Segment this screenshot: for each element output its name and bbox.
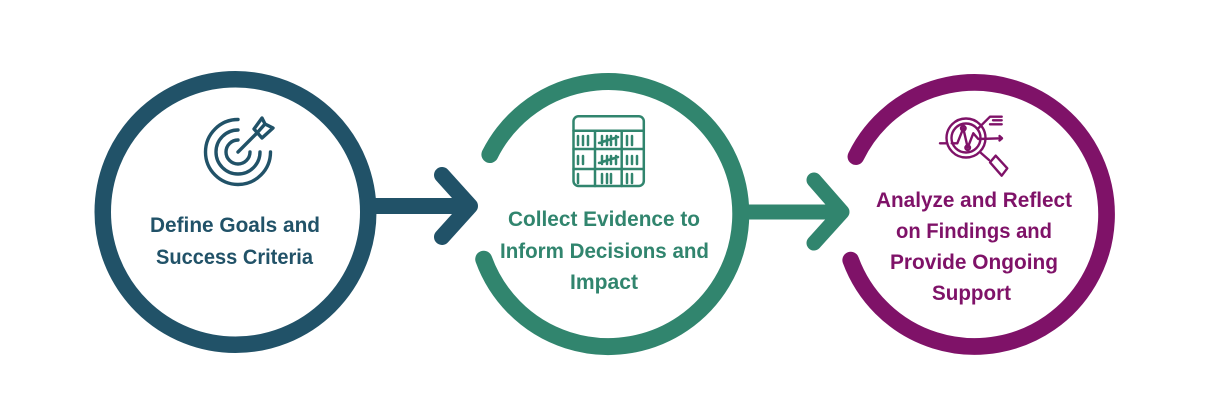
arrow: collect to analyze (746, 180, 842, 243)
label: analyze and reflect: Support (932, 282, 1011, 305)
panel: collect evidence (484, 82, 741, 347)
circle ring: analyze and reflect (851, 82, 1107, 346)
label: define goals: Success Criteria (156, 246, 313, 269)
panel: define goals (103, 79, 368, 345)
circle ring: collect evidence (484, 82, 741, 347)
label: analyze and reflect: Provide Ongoing (890, 251, 1058, 274)
arrow: define to collect (372, 175, 470, 237)
icon: magnifier over chart (940, 117, 1007, 176)
label: analyze and reflect (876, 189, 1072, 305)
panel: analyze and reflect (851, 82, 1107, 346)
icon: target with arrow (206, 118, 273, 184)
label: analyze and reflect: on Findings and (896, 220, 1052, 243)
label: collect evidence: Collect Evidence to (508, 208, 700, 231)
label: analyze and reflect: Analyze and Reflect (876, 189, 1072, 212)
label: collect evidence (500, 208, 709, 294)
label: collect evidence: Impact (570, 271, 638, 294)
circle ring: define goals (103, 79, 368, 345)
icon: tally table (574, 116, 644, 186)
label: collect evidence: Inform Decisions and (500, 240, 709, 263)
label: define goals (150, 214, 320, 269)
label: define goals: Define Goals and (150, 214, 320, 237)
